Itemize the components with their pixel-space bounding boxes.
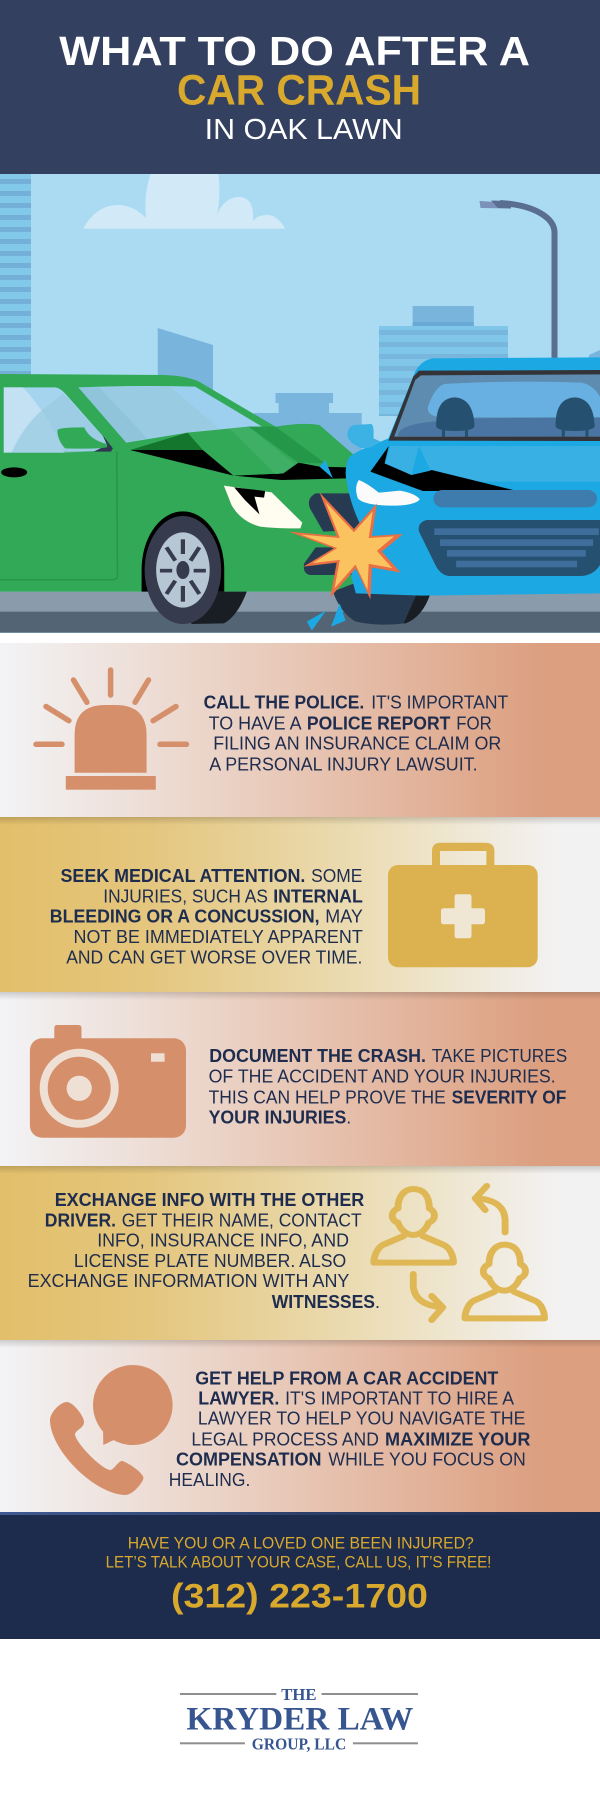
text: document the crash xyxy=(209,1046,567,1127)
crumpled hood xyxy=(187,427,325,476)
text: call the police xyxy=(204,692,508,774)
text: get help xyxy=(169,1368,530,1490)
icon: phone with speech bubble xyxy=(50,1365,173,1495)
text: call the police: FILING AN INSURANCE CLAIM OR xyxy=(213,733,501,753)
text: seek medical attention: BLEEDING OR A CONCUSSION, xyxy=(50,906,320,926)
icon: medical kit xyxy=(388,843,538,967)
text: document the crash: YOUR INJURIES xyxy=(209,1107,346,1127)
blue car hood xyxy=(383,446,600,482)
logo: the kryder law group: GROUP, LLC xyxy=(252,1735,346,1754)
logo: the kryder law group: THE xyxy=(281,1685,316,1704)
text: get help: COMPENSATION xyxy=(176,1449,322,1469)
text: call the police: TO HAVE A xyxy=(209,713,302,733)
text: exchange info xyxy=(28,1190,380,1312)
text: seek medical attention: MAY xyxy=(325,906,363,926)
green car side window xyxy=(4,387,109,453)
blue car crumple xyxy=(370,446,516,491)
hero illustration: car crash xyxy=(0,170,600,633)
text: call the police: A PERSONAL INJURY LAWSUIT. xyxy=(209,754,478,774)
text: get help: WHILE YOU FOCUS ON xyxy=(328,1449,526,1469)
text: exchange info: DRIVER. xyxy=(45,1210,116,1230)
text: document the crash: . xyxy=(346,1107,351,1127)
call to action panel xyxy=(0,1512,600,1639)
title line one: WHAT TO DO AFTER A xyxy=(59,28,530,74)
road xyxy=(0,592,600,633)
text: exchange info: GET THEIR NAME, CONTACT xyxy=(122,1210,362,1230)
text: exchange info: . xyxy=(375,1292,380,1312)
text: document the crash: TAKE PICTURES xyxy=(432,1046,567,1066)
logo: the kryder law group xyxy=(180,1685,418,1754)
text: exchange info: WITNESSES xyxy=(272,1292,375,1312)
blue car xyxy=(333,357,600,625)
text: seek medical attention: INTERNAL xyxy=(273,886,363,906)
cta question: HAVE YOU OR A LOVED ONE BEEN INJURED? xyxy=(128,1533,474,1552)
phone number: (312) 223-1700 xyxy=(171,1577,428,1615)
text: get help: MAXIMIZE YOUR xyxy=(385,1429,530,1449)
text: get help: LAWYER TO HELP YOU NAVIGATE THE xyxy=(198,1408,525,1428)
impact star xyxy=(289,492,403,599)
debris shards xyxy=(307,460,346,631)
arrow up-left xyxy=(475,1186,505,1232)
blue car headlight xyxy=(356,480,420,506)
text: document the crash: SEVERITY OF xyxy=(452,1087,566,1107)
text: exchange info: EXCHANGE INFO WITH THE OTHER xyxy=(55,1190,364,1210)
subtitle: IN OAK LAWN xyxy=(205,114,403,146)
text: call the police: CALL THE POLICE. xyxy=(204,692,364,712)
text: exchange info: LICENSE PLATE NUMBER. ALSO xyxy=(74,1251,346,1271)
text: document the crash: THIS CAN HELP PROVE THE xyxy=(209,1087,446,1107)
title line two: CAR CRASH xyxy=(177,67,421,114)
text: document the crash: OF THE ACCIDENT AND YOUR INJURIES. xyxy=(209,1066,556,1086)
green car windshield xyxy=(78,386,262,443)
door seam and handle xyxy=(0,452,117,580)
cta invitation: LET’S TALK ABOUT YOUR CASE, CALL US, IT’S FREE! xyxy=(106,1552,491,1571)
arrow down-right xyxy=(413,1274,443,1320)
green car xyxy=(0,374,362,624)
header panel xyxy=(0,0,600,174)
text: get help: HEALING. xyxy=(169,1470,250,1490)
text: seek medical attention: AND CAN GET WORSE OVER TIME. xyxy=(66,947,362,967)
cloud xyxy=(83,170,285,229)
text: call the police: POLICE REPORT xyxy=(307,713,450,733)
blue car bumper strip xyxy=(434,490,597,507)
street light xyxy=(480,200,554,360)
text: get help: IT'S IMPORTANT TO HIRE A xyxy=(285,1388,514,1408)
text: get help: GET HELP FROM A CAR ACCIDENT xyxy=(195,1368,498,1388)
band 5: get help from a lawyer xyxy=(0,1340,600,1512)
text: seek medical attention: NOT BE IMMEDIATELY APPARENT xyxy=(74,927,363,947)
logo: the kryder law group: KRYDER LAW xyxy=(186,1701,413,1737)
band 3: document the crash xyxy=(0,992,600,1166)
person one xyxy=(374,1189,453,1263)
text: seek medical attention: SOME xyxy=(311,866,362,886)
text: exchange info: EXCHANGE INFORMATION WITH ANY xyxy=(28,1271,349,1291)
icon: two people exchanging info xyxy=(374,1186,545,1320)
band 4: exchange info xyxy=(0,1166,600,1340)
band 2: seek medical attention xyxy=(0,817,600,992)
icon: camera xyxy=(30,1025,186,1138)
text: exchange info: INFO, INSURANCE INFO, AND xyxy=(97,1230,349,1250)
green car wheel xyxy=(142,511,247,624)
side mirror xyxy=(57,427,113,452)
text: get help: LEGAL PROCESS AND xyxy=(191,1429,379,1449)
text: seek medical attention: SEEK MEDICAL ATTENTION. xyxy=(60,866,305,886)
icon: siren xyxy=(36,670,186,790)
band 1: call the police xyxy=(0,643,600,817)
text: call the police: IT'S IMPORTANT xyxy=(371,692,508,712)
text: call the police: FOR xyxy=(456,713,492,733)
green car grilles xyxy=(304,493,362,575)
blue car grille xyxy=(419,520,600,576)
left striped building xyxy=(0,174,31,376)
text: get help: LAWYER. xyxy=(198,1388,279,1408)
blue car windshield xyxy=(388,370,600,441)
crumple shard xyxy=(130,450,346,480)
skyline buildings xyxy=(158,306,600,470)
text: document the crash: DOCUMENT THE CRASH. xyxy=(209,1046,426,1066)
text: seek medical attention: INJURIES, SUCH AS xyxy=(103,886,268,906)
blue car mirror xyxy=(347,424,381,448)
person two xyxy=(465,1245,545,1318)
text: seek medical attention xyxy=(50,866,363,967)
green car headlight xyxy=(224,486,302,528)
blue car wheel xyxy=(333,583,430,625)
